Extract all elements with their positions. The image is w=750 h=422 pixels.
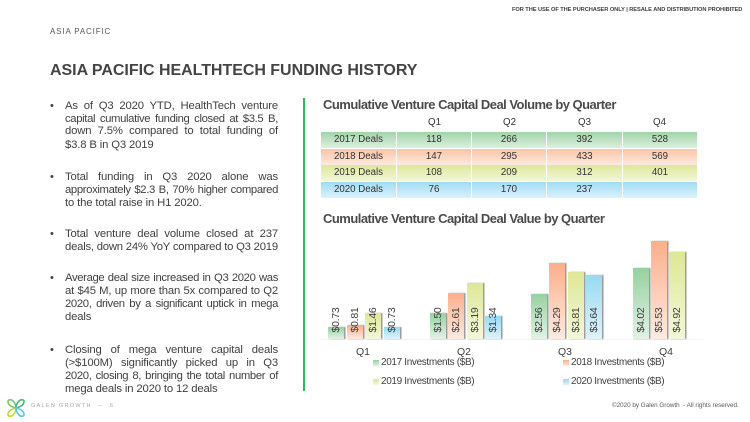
bullet 5: • <box>50 344 54 356</box>
table: deal volume <box>321 117 697 198</box>
bars: Q1: $0.81 <box>349 307 361 333</box>
axis labels <box>356 346 673 358</box>
row: 2019 deals: 209 <box>501 167 517 178</box>
bullet 2 <box>50 171 278 209</box>
bullet 3: • <box>50 228 54 240</box>
bars: Q1: $1.46 <box>367 307 379 333</box>
table header: Q3 <box>578 117 591 128</box>
legend: 2018: 2018 Investments ($B) <box>571 357 664 368</box>
heading: deal value: Cumulative Venture Capital Deal Value by Quarter <box>323 211 604 226</box>
row: 2019 deals: 108 <box>426 167 442 178</box>
row: 2018 deals: 295 <box>501 151 517 162</box>
row: 2017 deals: 2017 Deals <box>334 134 383 145</box>
axis labels: Q4 <box>659 346 673 358</box>
bullet 4: 2020, driven by a significant uptick in mega <box>65 298 278 310</box>
bars: Q4: $4.02 <box>635 307 647 333</box>
bullet 2: Total funding in Q3 2020 alone was <box>65 171 278 183</box>
row: 2018 deals: 2018 Deals <box>334 151 383 162</box>
bullet 4 <box>50 272 278 323</box>
bullet 1 <box>50 100 278 151</box>
notice: purchaser use only: FOR THE USE OF THE PURCHASER ONLY | RESALE AND DISTRIBUTION PROHIBITED <box>512 7 742 13</box>
row: 2019 deals: 2019 Deals <box>334 167 383 178</box>
bars: Q4: $5.53 <box>653 307 665 333</box>
row: 2020 deals: 76 <box>429 184 439 195</box>
legend: 2017: 2017 Investments ($B) <box>381 357 474 368</box>
axis labels: Q3 <box>558 346 572 358</box>
table header <box>428 117 666 128</box>
section label: ASIA PACIFIC <box>50 27 111 36</box>
row: 2018 deals: 433 <box>576 151 593 162</box>
row: 2017 deals: 266 <box>501 134 517 145</box>
axis labels: Q2 <box>457 346 471 358</box>
bars: Q3: $4.29 <box>551 307 563 333</box>
row: 2017 deals <box>321 132 697 148</box>
legend <box>373 357 664 387</box>
bars: Q1: $0.73 <box>330 307 342 333</box>
table header: Q1 <box>428 117 441 128</box>
axis line <box>318 339 703 340</box>
bullet 2: to the total raise in H1 2020. <box>65 197 202 209</box>
row: 2018 deals: 569 <box>652 151 668 162</box>
bars: Q2: $1.34 <box>487 307 499 333</box>
bars: Q1 <box>328 307 402 340</box>
bars: Q3 <box>531 262 604 340</box>
icon: Galen Growth logo <box>7 398 25 418</box>
heading: deal volume: Cumulative Venture Capital Deal Volume by Quarter <box>323 97 616 112</box>
bars: Q3: $3.64 <box>588 307 600 333</box>
row: 2017 deals: 528 <box>652 134 668 145</box>
bullet 5 <box>50 344 278 395</box>
bars: Q3: $2.56 <box>533 307 545 333</box>
row: 2018 deals <box>321 149 697 165</box>
bullet 1: $3.8 B in Q3 2019 <box>65 139 154 151</box>
bullet 3: Total venture deal volume closed at 237 <box>65 228 278 240</box>
bullet 4: deals <box>65 311 91 323</box>
bullet 2: • <box>50 171 54 183</box>
bars: Q2: $2.61 <box>450 307 462 333</box>
bullet 1: As of Q3 2020 YTD, HealthTech venture <box>65 100 278 112</box>
row: 2020 deals: 170 <box>501 184 517 195</box>
bullet 4: • <box>50 272 54 284</box>
footer: copyright: ©2020 by Galen Growth - All rights reserved. <box>612 402 739 409</box>
bullet 5: mega deals in 2020 to 12 deals <box>65 383 218 395</box>
row: 2017 deals: 392 <box>576 134 593 145</box>
row: 2019 deals: 401 <box>652 167 668 178</box>
row: 2018 deals: 147 <box>426 151 442 162</box>
bullet 3 <box>50 228 278 253</box>
bullet 4: at $45 M, up more than 5x compared to Q2 <box>65 285 278 297</box>
bullet 5: 2020, closing 8, bringing the total number of <box>65 370 278 382</box>
table header: Q4 <box>653 117 666 128</box>
bullet 1: down 7.5% compared to total funding of <box>65 125 278 137</box>
row: 2020 deals: 237 <box>576 184 593 195</box>
title: ASIA PACIFIC HEALTHTECH FUNDING HISTORY <box>50 62 417 79</box>
row: 2019 deals <box>321 165 697 181</box>
bars: Q4: $4.92 <box>671 307 683 333</box>
row: 2020 deals: 2020 Deals <box>334 184 383 195</box>
bullet 4: Average deal size increased in Q3 2020 was <box>65 272 278 284</box>
legend: 2020: 2020 Investments ($B) <box>571 376 664 387</box>
bullet 1: • <box>50 100 54 112</box>
bars: Q4 <box>633 240 687 340</box>
bullet 5: (>$100M) significantly picked up in Q3 <box>65 357 278 369</box>
bullet 5: Closing of mega venture capital deals <box>65 344 278 356</box>
bars: Q2 <box>430 282 503 340</box>
bullet 2: approximately $2.3 B, 70% higher compared <box>65 184 278 196</box>
axis labels: Q1 <box>356 346 370 358</box>
row: 2019 deals: 312 <box>576 167 593 178</box>
row: 2020 deals <box>321 182 697 198</box>
bar chart: deal value <box>318 240 703 387</box>
row: 2017 deals: 118 <box>426 134 442 145</box>
bars: Q2: $3.19 <box>469 307 481 333</box>
legend: 2019: 2019 Investments ($B) <box>381 376 474 387</box>
bullet 3: deals, down 24% YoY compared to Q3 2019 <box>65 241 278 253</box>
table header: Q2 <box>503 117 516 128</box>
bars: Q2: $1.50 <box>432 307 444 333</box>
bullet 1: capital cumulative funding closed at $3.5 B, <box>65 113 278 125</box>
divider <box>303 98 305 391</box>
bars: Q1: $0.73 <box>386 307 398 333</box>
text block: bullet points <box>50 100 278 395</box>
bars: Q3: $3.81 <box>570 307 582 333</box>
footer: brand and page number: GALEN GROWTH — 6 <box>31 403 114 409</box>
